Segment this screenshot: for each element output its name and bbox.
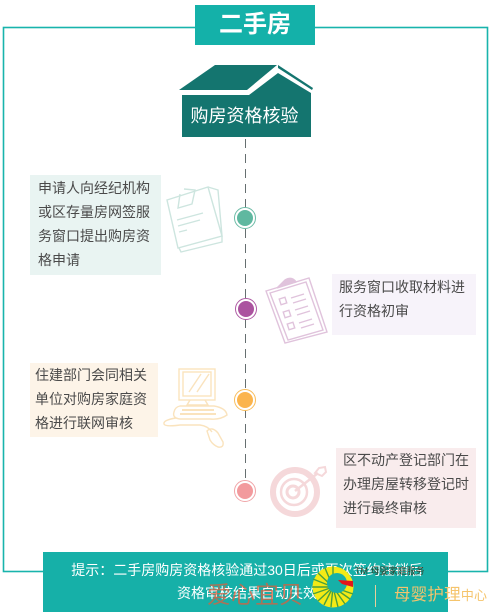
timeline dot 4 <box>234 480 256 502</box>
timeline dashed line <box>244 139 246 480</box>
step 3 text box: 格进行联网审核 <box>35 415 133 431</box>
step 2 text box: 服务窗口收取材料进 <box>339 279 465 295</box>
step 2 text box: 行资格初审 <box>339 303 409 319</box>
footer tip bar: 提示：二手房购房资格核验通过30日后或再次签约注销后 <box>71 562 423 578</box>
title banner <box>195 5 315 45</box>
watermark small label: TM 母婴家庭服务 <box>355 566 424 576</box>
step 3 text box <box>30 363 158 437</box>
step 1 text box: 务窗口提出购房资 <box>38 228 150 244</box>
step 4 text box: 办理房屋转移登记时 <box>343 476 469 492</box>
timeline dot 2 <box>236 298 256 320</box>
watermark divider <box>375 585 376 607</box>
watermark logo <box>312 566 354 608</box>
house label: 购房资格核验 <box>190 106 298 126</box>
timeline dot 1 <box>234 208 256 228</box>
step 2 text box <box>332 274 476 335</box>
icon: target with arrow <box>273 467 326 514</box>
watermark nursing center: 母婴护理中心 <box>394 586 487 604</box>
step 1 text box: 格申请 <box>38 252 80 268</box>
footer tip bar <box>43 552 448 612</box>
icon: computer <box>164 369 227 447</box>
step 3 text box: 单位对购房家庭资 <box>35 391 147 407</box>
step 1 text box: 申请人向经纪机构 <box>38 180 150 196</box>
title banner: 二手房 <box>219 11 291 38</box>
step 3 text box: 住建部门会同相关 <box>35 367 147 383</box>
icon: house <box>179 65 313 137</box>
step 4 text box: 进行最终审核 <box>343 500 427 516</box>
icon: clipboard checklist <box>266 278 327 343</box>
footer tip bar: 资格审核结果自动失效 <box>177 585 317 601</box>
step 1 text box <box>30 175 161 275</box>
timeline dot 3 <box>234 390 256 410</box>
icon: paper notes <box>167 187 222 252</box>
step 4 text box: 区不动产登记部门在 <box>343 452 469 468</box>
step 1 text box: 或区存量房网签服 <box>38 204 150 220</box>
step 4 text box <box>336 448 476 528</box>
watermark brand name: 爱心宜贝 <box>207 582 303 609</box>
